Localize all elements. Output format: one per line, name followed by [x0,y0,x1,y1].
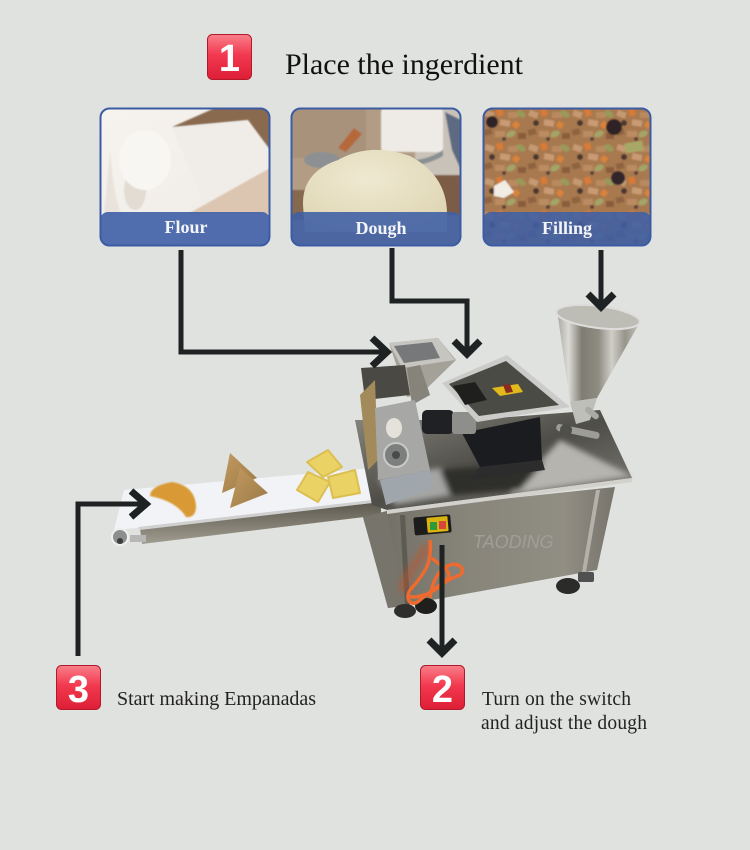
switch box [413,514,452,536]
machine [112,301,641,618]
flour photo [102,110,268,215]
arrow: step 3 to conveyor [78,491,146,656]
extruder [422,410,476,434]
orange cable [402,540,462,603]
filling funnel [555,301,641,439]
flour border [100,108,270,246]
dough label band [291,212,461,246]
arrow: flour to hopper [181,250,387,366]
arrow: filling to funnel [588,250,614,307]
badge: step 1: 1 [219,38,240,80]
ravioli [297,450,360,502]
badge: step 2 [420,666,464,711]
dough border [292,108,460,246]
dough rollers [360,365,432,505]
conveyor [112,468,381,545]
black gearbox [462,417,545,480]
dough photo [291,108,461,246]
step 2 text: Turn on the switch [482,689,631,710]
panel: filling [480,105,655,250]
table top [355,410,632,514]
infographic canvas [56,34,652,734]
flour label band [100,212,270,246]
badge: step 2: 2 [432,669,453,711]
arrow: dough to tray [392,248,480,354]
panel: flour [100,108,270,246]
filling label: Filling [542,218,592,238]
filling border [484,108,650,246]
flour label: Flour [164,217,208,237]
dough label: Dough [355,218,407,238]
step 3 text: Start making Empanadas [117,688,316,710]
step 2 text: and adjust the dough [481,713,647,734]
panel: dough [291,108,461,246]
machine body [363,487,615,608]
arrow: switch to step 2 [429,545,455,653]
wheels [394,572,594,618]
step 2 text [481,689,647,734]
filling label band [483,212,651,246]
badge: step 3: 3 [68,669,89,711]
empanada [150,482,196,517]
badge: step 3 [56,666,100,711]
brand watermark: TAODING [473,532,554,552]
title: Place the ingerdient [285,48,524,81]
samosas [222,453,268,508]
food on conveyor [150,450,360,517]
tray [442,355,570,422]
filling photo [484,110,650,244]
badge: step 1 [208,34,252,80]
hopper [389,338,456,405]
